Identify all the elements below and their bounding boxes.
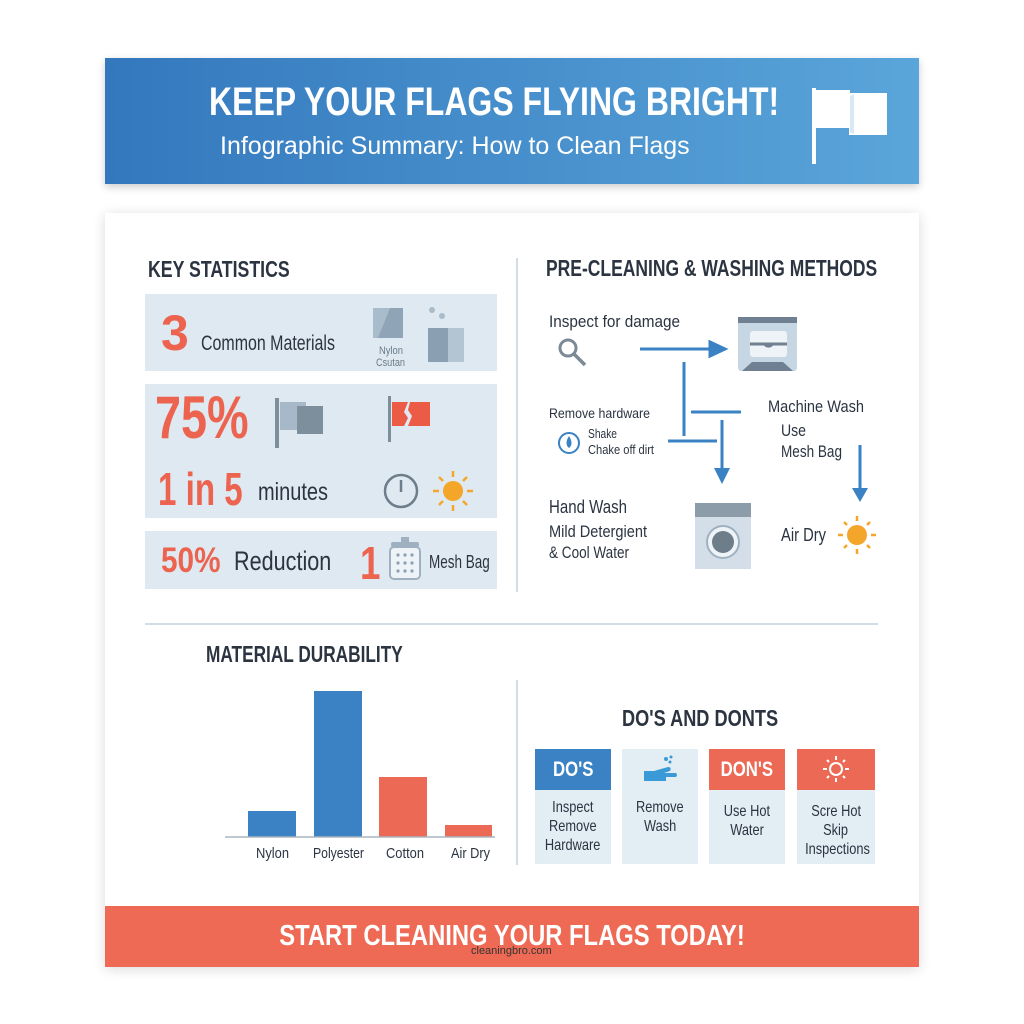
- stat box: 50% reduction: 50%: [161, 541, 221, 580]
- flowchart: Inspect for damage: [549, 312, 680, 331]
- card: scre hot: Inspections: [805, 841, 870, 858]
- icon: torn red flag: [388, 396, 430, 442]
- flowchart: & Cool Water: [549, 543, 629, 562]
- card: remove wash: Wash: [644, 818, 676, 835]
- card: scre hot: Scre Hot: [811, 803, 861, 820]
- flowchart: Mild Detergient: [549, 522, 647, 541]
- heading: key statistics: KEY STATISTICS: [148, 256, 290, 282]
- flowchart: [549, 312, 876, 569]
- stat box: 50% reduction: Mesh Bag: [429, 552, 490, 572]
- stat box: 50% reduction: [145, 531, 497, 589]
- stat box: 75% / 1 in 5: [145, 384, 497, 518]
- card: do's: DO'S: [553, 758, 593, 781]
- icon: sun: [838, 516, 876, 554]
- heading: material durability: MATERIAL DURABILITY: [206, 641, 403, 667]
- flowchart: Chake off dirt: [588, 442, 654, 457]
- card: scre hot: [797, 749, 875, 864]
- header banner: [105, 58, 919, 184]
- card: do's: Remove: [549, 818, 597, 835]
- card: scre hot: Skip: [824, 822, 848, 839]
- icon: dryer: [738, 317, 797, 371]
- card: do's: Inspect: [552, 799, 594, 816]
- subtitle: Infographic Summary: How to Clean Flags: [220, 132, 690, 160]
- card: remove wash: Remove: [636, 799, 684, 816]
- stat box: 75% / 1 in 5: 75%: [155, 384, 249, 451]
- card: do's: [535, 749, 611, 864]
- flowchart: Remove hardware: [549, 405, 650, 421]
- heading: dos and donts: DO'S AND DONTS: [622, 705, 778, 731]
- footer banner: START CLEANING YOUR FLAGS TODAY!: [279, 920, 745, 952]
- bar chart: Air Dry: [451, 845, 490, 862]
- card: don's: [709, 749, 785, 864]
- stat box: 50% reduction: 1: [360, 537, 380, 589]
- heading: pre-cleaning: PRE-CLEANING & WASHING METHODS: [546, 255, 877, 281]
- icon: clock: [384, 474, 418, 508]
- flowchart: Air Dry: [781, 525, 826, 545]
- card: don's: Use Hot: [724, 803, 770, 820]
- card: don's: DON'S: [721, 758, 773, 781]
- icon: fabric swatches: [373, 307, 464, 367]
- stat box: 75% / 1 in 5: minutes: [258, 478, 328, 506]
- flowchart: Machine Wash: [768, 397, 864, 416]
- flowchart: Use: [781, 421, 806, 440]
- icon: magnifier: [560, 340, 585, 365]
- bar chart: Cotton: [386, 845, 424, 862]
- stat box: common materials: 3: [161, 305, 189, 361]
- stat box: common materials: [145, 294, 497, 371]
- icon: flag: [812, 88, 887, 164]
- flowchart: Mesh Bag: [781, 442, 842, 461]
- stat box: 50% reduction: Reduction: [234, 546, 331, 576]
- card: do's: Hardware: [545, 837, 601, 854]
- stat box: 75% / 1 in 5: 1 in 5: [158, 463, 243, 515]
- flowchart: Hand Wash: [549, 497, 627, 517]
- stat box: common materials: Common Materials: [201, 332, 335, 355]
- footer banner: [105, 906, 919, 967]
- footer banner: cleaningbro.com: [471, 945, 552, 957]
- card: remove wash: [622, 749, 698, 864]
- bar chart: Polyester: [313, 845, 364, 862]
- icon: mesh bag: [389, 537, 421, 580]
- flowchart: Shake: [588, 426, 617, 441]
- icon: sun: [433, 471, 473, 511]
- bar chart: Nylon: [256, 845, 289, 862]
- icon: washing machine: [695, 503, 751, 569]
- icon: grey flag: [275, 398, 323, 448]
- card: don's: Water: [730, 822, 764, 839]
- title: KEEP YOUR FLAGS FLYING BRIGHT!: [209, 80, 779, 124]
- main card: [105, 213, 919, 967]
- bar chart: [225, 691, 495, 862]
- icon: fabric swatches: Nylon: [379, 345, 403, 357]
